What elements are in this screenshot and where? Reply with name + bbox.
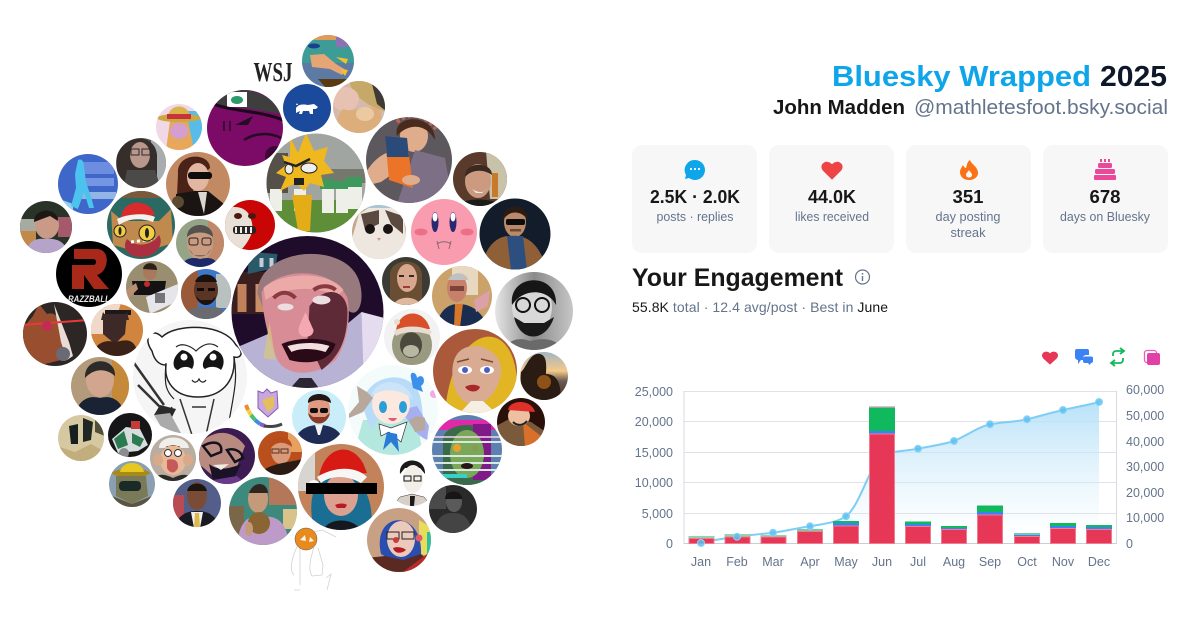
avatar: red hooded puppet: [224, 199, 276, 251]
left axis labels: [635, 385, 673, 551]
icon: shield with rainbow arc: [246, 389, 282, 427]
line points: [698, 398, 1102, 546]
panel: days on Bluesky: [1043, 145, 1168, 253]
stat label: likes received: [795, 210, 869, 224]
month labels: Feb: [726, 555, 748, 569]
avatar: yellow hardhat mask: [108, 460, 156, 508]
cumulative area: [701, 402, 1099, 544]
icon: flame: [960, 160, 978, 180]
month labels: Nov: [1052, 555, 1075, 569]
icon: chat bubble: [685, 160, 705, 180]
stat label line 2: streak: [950, 226, 986, 240]
month labels: Oct: [1017, 555, 1037, 569]
left axis labels: 0: [666, 537, 673, 551]
right axis labels: [1126, 383, 1164, 551]
avatar: man drawing: [125, 260, 179, 314]
avatar: cartoon boy pulling face: [149, 434, 197, 482]
stat value: 351: [952, 187, 984, 207]
heading year: 2025: [1100, 61, 1167, 93]
avatar: California bear: [282, 83, 332, 133]
left axis labels: 25,000: [635, 385, 673, 399]
avatar: gorilla with santa hat: [383, 308, 441, 367]
avatar: Pop Team Epic sketch: [132, 319, 248, 435]
month labels: Dec: [1088, 555, 1110, 569]
icon: reposts arrows: [1111, 348, 1124, 366]
right axis labels: 10,000: [1126, 511, 1164, 525]
avatar: bearded officer: [291, 389, 347, 445]
title: [773, 61, 1168, 119]
avatar: woman with cat mask: [90, 303, 144, 357]
panel: likes received: [769, 145, 894, 253]
pink quote cap: [869, 406, 895, 408]
avatar: woman long hair: [381, 256, 431, 306]
icon: quotes squares: [1144, 350, 1160, 365]
stat label: day posting: [936, 210, 1001, 224]
left axis labels: 15,000: [635, 446, 673, 460]
icon: replies bubbles: [1075, 349, 1093, 365]
month labels: [691, 555, 1110, 569]
user handle: @mathletesfoot.bsky.social: [914, 97, 1168, 119]
legend icons: [1042, 348, 1160, 366]
avatar: map with silhouette: [57, 414, 105, 462]
month labels: Jun: [872, 555, 892, 569]
stat value: 2.5K · 2.0K: [650, 187, 740, 207]
avatar: woman in orange light: [257, 430, 303, 476]
green repost bars: [688, 407, 1112, 538]
right axis labels: 20,000: [1126, 486, 1164, 500]
left axis labels: 5,000: [642, 507, 673, 521]
avatar: Mark Cuban style: [452, 151, 508, 207]
avatar: young man: [70, 356, 130, 416]
avatar: glitch portrait: [431, 414, 503, 486]
avatar: man with sunglasses and mustache: [479, 198, 551, 270]
avatar: santa hat with censor bar: [297, 443, 385, 531]
grid lines: [684, 391, 1117, 544]
month labels: Mar: [762, 555, 784, 569]
month labels: May: [834, 555, 859, 569]
avatar: Razzball logo: [55, 240, 123, 308]
avatar: woman with cat: [331, 80, 386, 134]
avatar: suit man flag: [172, 478, 222, 528]
right axis labels: 30,000: [1126, 460, 1164, 474]
avatar: sunset silhouette: [519, 351, 569, 401]
avatar: woman with glasses: [115, 137, 167, 189]
avatar: smiling man glasses: [175, 218, 225, 268]
stat value: 44.0K: [808, 187, 856, 207]
avatar: red cap cartoon: [496, 397, 546, 447]
month labels: Sep: [979, 555, 1001, 569]
right axis labels: 0: [1126, 537, 1133, 551]
red like bars: [689, 434, 1112, 544]
label: WSJ wordmark: WSJ: [254, 57, 292, 87]
stat value: 678: [1090, 187, 1120, 207]
avatar: straw hat girl: [155, 103, 203, 151]
right axis labels: 50,000: [1126, 409, 1164, 423]
icon: heart: [822, 162, 842, 179]
icon: likes heart: [1042, 352, 1058, 364]
cumulative line: [701, 402, 1099, 543]
right axis labels: 60,000: [1126, 383, 1164, 397]
avatar: black and white bearded man: [494, 271, 574, 351]
icon: cake: [1094, 159, 1116, 180]
avatar: horse with laser eyes: [22, 301, 88, 367]
right axis labels: 40,000: [1126, 435, 1164, 449]
month labels: Aug: [943, 555, 965, 569]
avatar: orange ball and sketch figure: [291, 528, 336, 590]
avatar: blue-haired anime girl: [347, 364, 439, 456]
heading: Bluesky Wrapped 2025: Bluesky Wrapped: [832, 61, 1091, 93]
stat label: days on Bluesky: [1060, 210, 1151, 224]
avatar: man with beard: [180, 268, 232, 320]
month labels: Apr: [800, 555, 820, 569]
avatar: smiling bearded man purple: [198, 427, 256, 485]
left axis labels: 20,000: [635, 415, 673, 429]
left axis labels: 10,000: [635, 476, 673, 490]
avatar: John Madden portrait: [230, 235, 384, 389]
avatar: purple cartoon with cap: [206, 89, 285, 167]
user name: John Madden: [773, 97, 905, 119]
avatar: blonde animated woman: [432, 328, 518, 414]
avatar: cartoon on teal blanket: [301, 34, 355, 88]
avatar: fluffy cat: [351, 204, 407, 260]
avatar: dark library man: [428, 484, 478, 534]
stat label: posts · replies: [656, 210, 734, 224]
avatar: engraved man: [387, 457, 437, 507]
blue reply bars: [833, 431, 1112, 537]
avatar: senator pointing: [431, 265, 493, 327]
section heading: Your Engagement: Your Engagement: [632, 264, 844, 292]
avatar: armored robot: [107, 412, 153, 458]
avatar: man with coconut: [228, 476, 298, 546]
month labels: Jul: [910, 555, 926, 569]
avatar: blue neon figure: [57, 153, 119, 215]
avatar: man at night: [19, 200, 73, 254]
avatar: woman with chips bag: [365, 116, 453, 204]
avatar: sun mascot with football team: [266, 133, 366, 233]
avatar: catbus santa: [106, 190, 176, 260]
panel: posts and replies: [632, 145, 757, 253]
avatar collage: [19, 34, 574, 590]
panel: day posting streak: [906, 145, 1031, 253]
icon: info: [856, 270, 870, 284]
avatar: Kirby: [410, 198, 478, 266]
avatar: clown with blue hair: [366, 507, 432, 573]
engagement summary: 55.8K total · 12.4 avg/post · Best in June: [632, 299, 888, 315]
chart: monthly engagement stacked bars and cumulative line: [635, 383, 1164, 569]
avatar: sunglasses woman: [165, 151, 231, 217]
avatar: Razzball logo: RAZZBALL: [68, 294, 110, 304]
month labels: Jan: [691, 555, 711, 569]
